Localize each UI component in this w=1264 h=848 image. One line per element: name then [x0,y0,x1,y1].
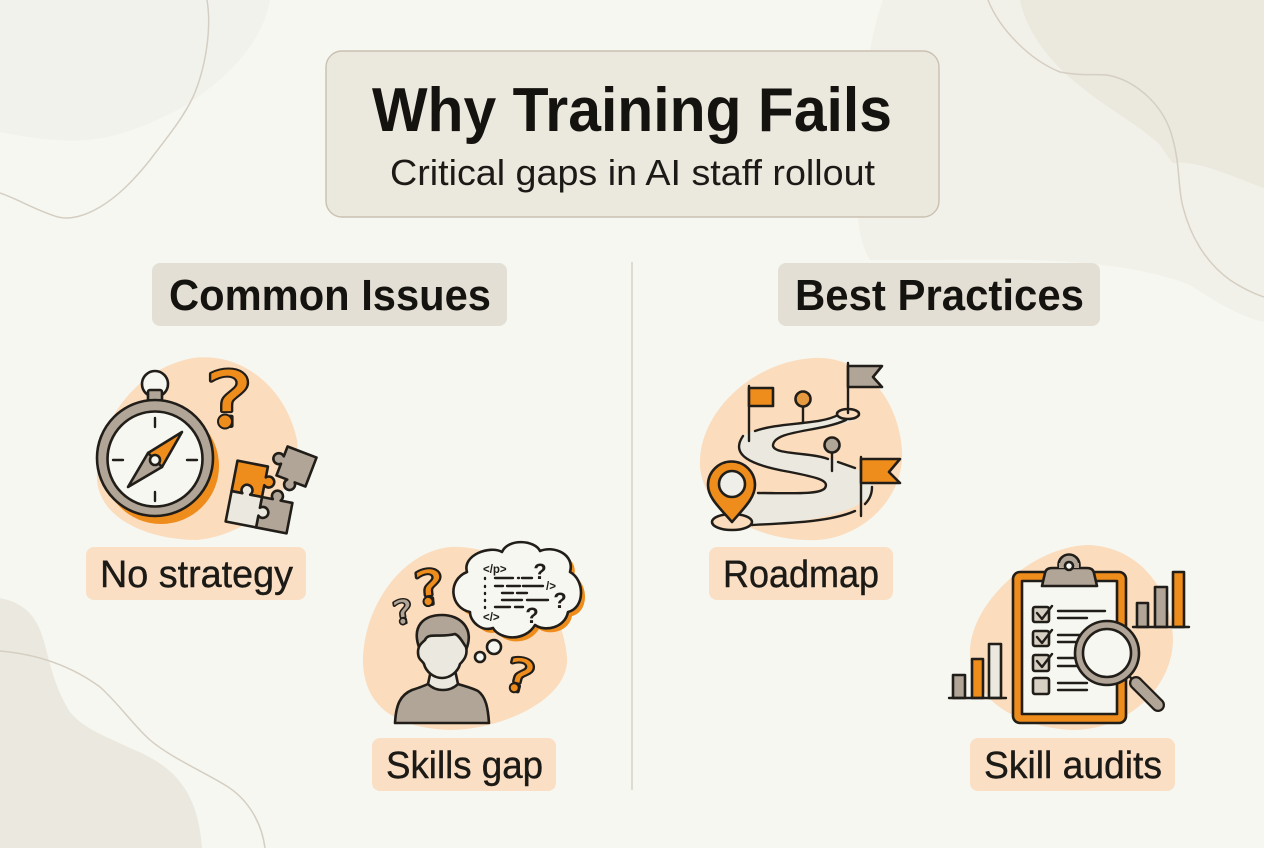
title panel [326,51,939,217]
title: Why Training Fails [372,76,892,145]
label: No strategy [86,547,306,600]
label: Skills gap: Skills gap [386,745,543,787]
heading: Best Practices: Best Practices [795,271,1084,320]
icon: winding roadmap with flags and pin [700,358,902,540]
icon: compass, question mark and puzzle: ? [205,355,253,444]
icon: confused person with thought cloud: ? [533,559,547,584]
label: No strategy: No strategy [100,554,293,596]
icon: compass, question mark and puzzle [97,355,317,540]
icon: confused person with thought cloud: ? [412,560,447,617]
icon: confused person with thought cloud: /> [546,581,556,593]
icon: confused person with thought cloud: ? [525,603,539,628]
label: Roadmap: Roadmap [723,554,879,596]
icon: confused person with thought cloud: ? [390,593,416,633]
icon: confused person with thought cloud [363,542,585,730]
icon: confused person with thought cloud: </> [483,612,500,624]
icon: confused person with thought cloud: </p> [483,564,507,576]
icon: audit clipboard, magnifier and bar charts [949,545,1189,730]
icon: confused person with thought cloud: ? [499,647,540,705]
label: Skill audits: Skill audits [984,745,1162,787]
subtitle: Critical gaps in AI staff rollout [390,152,875,193]
heading: Common Issues: Common Issues [169,271,491,320]
icon: confused person with thought cloud: ? [553,588,567,613]
